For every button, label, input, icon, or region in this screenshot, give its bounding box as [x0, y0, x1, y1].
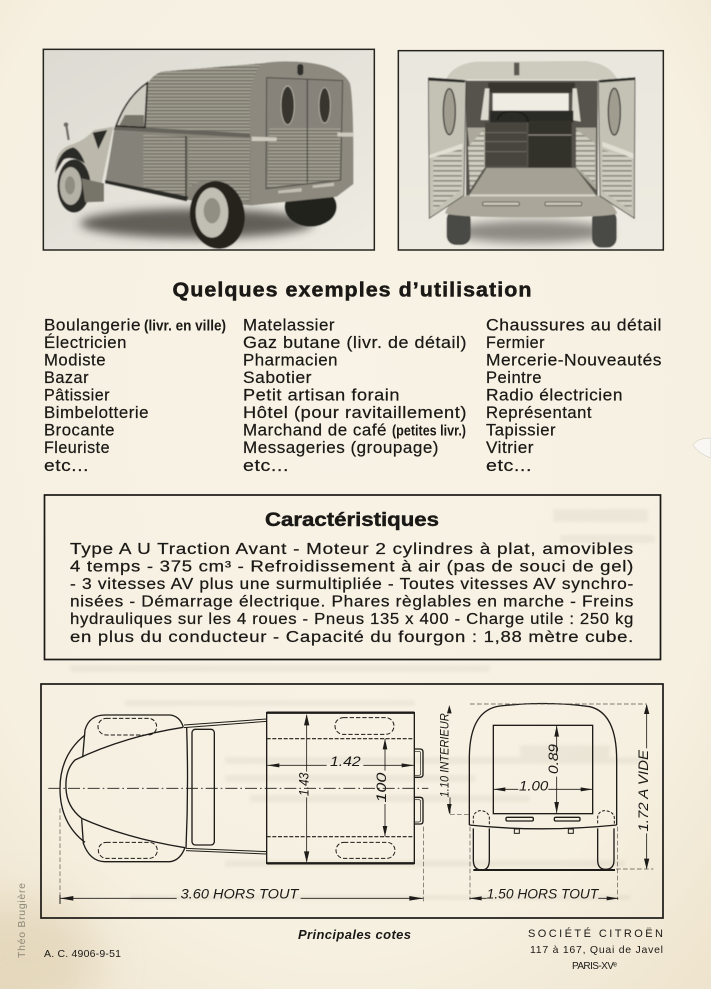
list: trades column 2: Sabotier: [243, 369, 312, 387]
caption: main dimensions: Principales cotes: [298, 927, 411, 942]
text block: technical specifications: hydrauliques sur les 4 roues - Pneus 135 x 400 - Charge utile : 250 kg: [70, 611, 634, 628]
panel: dimension drawings: [41, 684, 663, 918]
list: trades column 1: Boulangerie: [44, 316, 141, 334]
drawing: top view with dimensions: [48, 713, 428, 904]
list: trades column 2: Pharmacien: [243, 352, 338, 370]
list: trades column 2: Hôtel (pour ravitaillement): [243, 404, 467, 422]
list: trades column 2: Petit artisan forain: [243, 386, 400, 404]
list: trades column 3: Représentant: [486, 404, 592, 422]
drawing: top view with dimensions: 3.60 HORS TOUT: [181, 886, 300, 902]
list: trades column 1: Fleuriste: [44, 439, 110, 457]
list: trades column 3: Tapissier: [486, 422, 556, 440]
heading: characteristics: Caractéristiques: [265, 510, 439, 531]
list: trades column 1: Pâtissier: [44, 386, 110, 404]
print reference: A. C. 4906-9-51: [44, 948, 121, 960]
text block: technical specifications: nisées - Démarrage électrique. Phares règlables en marche - Freins: [70, 594, 634, 610]
text block: technical specifications: en plus du conducteur - Capacité du fourgon : 1,88 mètre cube.: [70, 629, 634, 646]
drawing: top view with dimensions: 1.43: [295, 772, 311, 796]
list: trades column 1: Brocante: [44, 422, 115, 440]
list: trades column 2: Messageries (groupage): [243, 439, 439, 457]
panel: characteristics: [44, 495, 660, 660]
list: trades column 2: etc...: [243, 457, 289, 475]
list: trades column 3: etc...: [486, 457, 532, 475]
list: trades column 2: Gaz butane (livr. de détail): [243, 334, 467, 352]
list: trades column 2: [243, 316, 467, 475]
list: trades column 1: [44, 316, 226, 475]
drawing: rear view with dimensions: 0.89: [545, 744, 561, 774]
list: trades column 1: etc...: [44, 457, 89, 475]
text block: technical specifications: Type A U Traction Avant - Moteur 2 cylindres à plat, amovibles: [70, 541, 634, 558]
drawing: top view with dimensions: 100: [373, 772, 389, 803]
text block: technical specifications: [70, 541, 634, 646]
photo: van side-rear view: [40, 47, 377, 253]
text block: technical specifications: - 3 vitesses AV plus une surmultipliée - Toutes vitesses AV synchro-: [70, 576, 634, 593]
list: trades column 2: Matelassier: [243, 316, 335, 334]
photo: van rear view with open doors: [395, 47, 667, 253]
list: trades column 3: Chaussures au détail: [486, 316, 662, 334]
list: trades column 3: Vitrier: [486, 439, 534, 457]
illustrator credit: Théo Brugière: [16, 883, 28, 958]
list: trades column 1: Électricien: [44, 333, 127, 352]
drawing: rear view with dimensions: 1.72 A VIDE: [635, 749, 651, 832]
company address: SOCIÉTÉ CITROËN: [528, 927, 663, 940]
drawing: rear view with dimensions: [438, 703, 653, 902]
list: trades column 3: [486, 316, 662, 475]
company address: PARIS-XVᵉ: [572, 961, 617, 972]
list: trades column 1: Bazar: [44, 369, 89, 387]
drawing: rear view with dimensions: 1.10 INTERIEUR: [438, 713, 452, 797]
drawing: rear view with dimensions: 1.50 HORS TOUT: [487, 886, 600, 902]
drawing: rear view with dimensions: 1.00: [519, 777, 549, 793]
drawing: top view with dimensions: 1.42: [330, 753, 361, 769]
list: trades column 3: Mercerie-Nouveautés: [486, 352, 662, 370]
list: trades column 1: Modiste: [44, 352, 106, 370]
text block: technical specifications: 4 temps - 375 cm³ - Refroidissement à air (pas de souci de gel): [70, 558, 634, 576]
list: trades column 3: Radio électricien: [486, 386, 623, 404]
list: trades column 3: Fermier: [486, 334, 545, 352]
list: trades column 2: Marchand de café: [243, 422, 387, 440]
company address: [528, 927, 663, 972]
list: trades column 1: Bimbelotterie: [44, 404, 149, 422]
list: trades column 3: Peintre: [486, 369, 542, 387]
list: trades column 1: (livr. en ville): [144, 318, 226, 334]
heading: usage examples: Quelques exemples d’utilisation: [172, 278, 532, 302]
company address: 117 à 167, Quai de Javel: [530, 944, 663, 956]
list: trades column 2: (petites livr.): [392, 424, 466, 440]
